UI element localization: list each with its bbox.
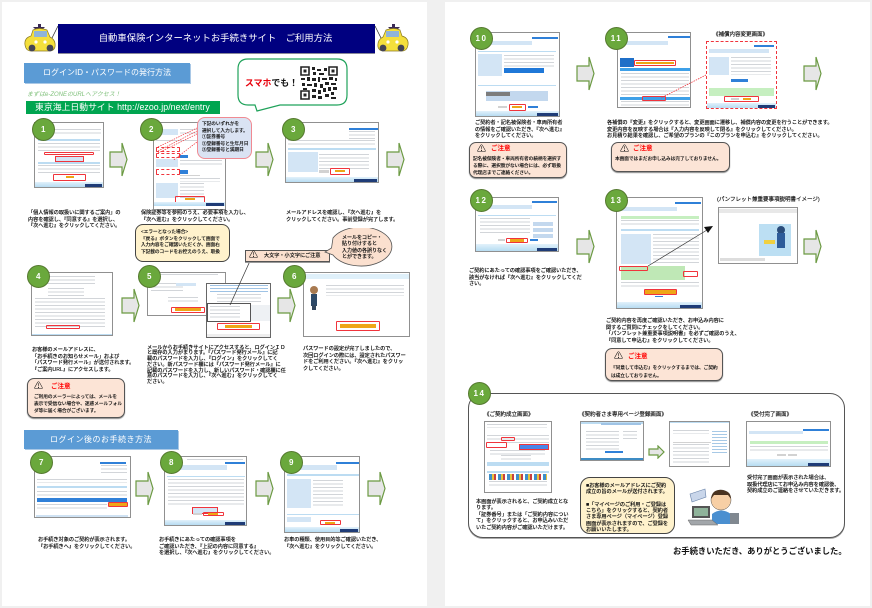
text step 9: 『次へ進む』をクリックしてください。 (284, 544, 376, 550)
arrow 5 (277, 288, 296, 322)
caution: step 13 (605, 348, 723, 381)
step 11 screenshot (617, 32, 691, 108)
text step 2 (141, 209, 249, 223)
caution text: 記名被保険者・車両所有者の続柄を選択す (473, 156, 561, 161)
step 5 screenshot B (206, 283, 271, 338)
text step 8: を選択し、『次へ進む』をクリックしてください。 (159, 550, 274, 556)
title banner: 自動車保険インターネットお手続きサイト ご利用方法 (99, 33, 332, 43)
text step 5 (147, 344, 286, 385)
arrow 10 (576, 56, 595, 90)
leader line (230, 263, 250, 306)
text step 10: の情報をご確認いただき、『次へ進む』 (475, 127, 565, 133)
text step 7: 『お手続きへ』をクリックしてください。 (38, 544, 135, 550)
step 2 screenshot (153, 122, 226, 210)
URL bar: 東京海上日動サイト http://ezoo.jp/next/entry (35, 102, 210, 112)
step 3 screenshot (285, 122, 379, 183)
text step 3: クリックしてください。事前登録が完了します。 (286, 217, 398, 223)
text step 11: お見積り結果を確認し、ご希望のプランの『このプランを申込む』をクリックしてください。 (607, 133, 823, 139)
text step 9 (284, 536, 381, 550)
caution: step 4 (27, 378, 125, 418)
screenshot: contract complete (484, 421, 552, 493)
caution heading: ご注意 (633, 145, 652, 152)
step 4 number: 4 (36, 272, 41, 281)
text step 12: 該当がなければ『次へ進む』をクリックしてくだ (469, 275, 582, 281)
ellipse text: とができます。 (342, 254, 377, 260)
caution text: 表示で受信ない場合や、迷惑メールフォル (34, 401, 122, 406)
icon: warning: ⚠ (620, 144, 629, 154)
arrow 8 (255, 472, 274, 506)
section heading: login ID and password: ログインID・パスワードの発行方法 (43, 68, 171, 77)
step 14 number (468, 382, 491, 405)
section heading: after login (24, 430, 178, 449)
callout body: ①証券番号 (202, 134, 225, 139)
caution text: る際に、選択肢がない場合には、必ず取扱 (473, 163, 561, 168)
label text: 大文字・小文字にご注意 (264, 253, 320, 259)
callout text: スマホでも！ (245, 78, 298, 88)
text step 5: 載のパスワードを入力し、『ログイン』をクリックしてく (147, 356, 278, 362)
label: case warning (245, 250, 330, 262)
step 2 number: 2 (149, 125, 154, 134)
text: reception complete: 契約成立のご連絡をさせていただきます。 (747, 488, 844, 494)
text step 4: 『ご案内URL』にアクセスします。 (32, 367, 113, 373)
closing thanks: お手続きいただき、ありがとうございました。 (673, 546, 847, 556)
callout body: ③登録番号と満期日 (202, 147, 244, 152)
box: my page notes: ■「マイページのご利用・ご登録は (586, 502, 666, 508)
callout: input choices with red leader lines (158, 117, 252, 160)
text step 8 (159, 536, 274, 556)
icon: warning: ⚠ (614, 351, 623, 361)
step 11 number: 11 (611, 34, 622, 43)
icon: yellow car right (374, 24, 408, 52)
text step 11: 各補償の『変更』をクリックすると、変更画面に遷移し、補償内容の変更を行うことができます。 (607, 120, 832, 126)
text step 1: 内容を確認し、『同意する』を選択し、 (28, 217, 118, 223)
text step 5: ださい。新パスワード欄には『パスワード発行メール』に (147, 362, 281, 368)
text: access prompt: まずはe-ZONEのURLへアクセス！ (27, 92, 121, 98)
step 11 number (605, 27, 628, 50)
step 10 screenshot (475, 32, 560, 117)
text: contract complete (476, 498, 569, 531)
icon: warning: ⚠ (477, 144, 486, 154)
step 7 screenshot (34, 456, 131, 518)
icon: yellow car left (24, 24, 58, 52)
step 6 number: 6 (292, 272, 297, 281)
text: reception complete: 取扱代理店にてお申込み内容を確認後、 (747, 482, 839, 488)
text step 7 (38, 536, 135, 550)
step 2 number (140, 118, 163, 141)
callout body: 選択して入力します。 (202, 128, 248, 132)
text step 4: 「パスワード発行メール」が送付されます。 (32, 360, 134, 366)
box: my page notes (580, 477, 675, 534)
label: reception complete: 《受付完了画面》 (748, 412, 792, 418)
step 4 number (27, 265, 50, 288)
label: pamphlet image: (パンフレット兼重要事項説明書イメージ) (717, 197, 820, 203)
box: error notice: 入力内容をご確認いただくか、画面右 (141, 242, 220, 247)
text step 13: ご契約内容を再度ご確認いただき、お申込み内容に (606, 318, 724, 324)
text step 5: ださい。 (147, 379, 168, 385)
caution text: は成立しておりません。 (611, 372, 662, 378)
coverage change screenshot (706, 41, 777, 109)
caution heading: ご注意 (628, 353, 648, 360)
text step 13: 「パンフレット兼重要事項説明書」を必ずご確認のうえ、 (606, 331, 740, 337)
step 9 screenshot (284, 456, 360, 533)
step 3 number: 3 (291, 125, 296, 134)
label: coverage change screen: 《補償内容変更画面》 (713, 32, 768, 38)
text step 4: お客様のメールアドレスに、 (32, 347, 99, 353)
arrow 2 (255, 142, 274, 176)
text step 13: 関するご質問にチェックをしてください。 (606, 325, 703, 331)
arrow 1 (109, 142, 128, 176)
caution text: ダ等に届く場合がございます。 (34, 408, 99, 413)
text: reception complete (747, 475, 844, 495)
callout body: 下記のいずれかを (202, 121, 239, 126)
caution text: 代理店までご連絡ください。 (473, 170, 533, 175)
text step 10 (475, 119, 565, 139)
arrow 11 (803, 56, 822, 90)
step 5 number (138, 265, 161, 288)
caution text (473, 156, 561, 175)
text step 6: クしてください。 (303, 366, 344, 372)
step 1 number: 1 (41, 125, 46, 134)
callout body (197, 117, 252, 159)
text step 8: お手続きにあたっての確認事項を (159, 537, 236, 543)
step 10 number (470, 27, 493, 50)
step 1 number (32, 118, 55, 141)
text step 12 (469, 267, 582, 287)
caution heading: ご注意 (51, 383, 70, 390)
label: my page registration: 《契約者さま専用ページ登録画面》 (579, 412, 667, 418)
caution text (611, 364, 718, 378)
text step 11: 変更内容を反映する場合は『入力内容を反映して閉る』をクリックしてください。 (607, 127, 797, 133)
box: my page notes: 画面が表示されますので、ご登録を (586, 521, 668, 527)
step 14 number: 14 (474, 389, 485, 398)
red dashed leader (660, 74, 706, 98)
caution: step 11 (611, 142, 730, 172)
text: contract complete: 「証券番号」または「ご契約内容につい (476, 512, 569, 518)
text: reception complete: 受付完了画面が表示された場合は、 (747, 475, 829, 481)
step 12 number (470, 189, 493, 212)
section heading: login ID and password (24, 63, 190, 83)
text step 6 (303, 345, 406, 372)
panel: page 2 (445, 2, 870, 606)
icon: QR code (300, 66, 338, 100)
text: contract complete: ります。 (476, 505, 496, 511)
box: my page notes: さま専用ページ（マイページ）登録 (586, 514, 668, 520)
text step 12: さい。 (469, 281, 484, 287)
box: my page notes: こちら」をクリックすると、契約者 (586, 508, 668, 514)
step 4 screenshot (31, 272, 113, 336)
arrow 7 (135, 472, 154, 506)
step 12 screenshot (475, 197, 559, 252)
text step 2: 保険証券等を参照のうえ、必要事項を入力し、 (141, 210, 249, 216)
box: my page notes: ■お客様のメールアドレスにご契約 (586, 483, 666, 489)
step 13 number: 13 (611, 196, 622, 205)
icon: person at laptop (686, 488, 741, 526)
text step 5: 意のパスワードを入力し、『次へ進む』をクリックしてく (147, 373, 278, 379)
box: error notice: <エラーとなった場合> (141, 229, 188, 234)
panel: page 1 (2, 2, 427, 606)
panel: step 14 (468, 393, 845, 538)
text step 6: パスワードの設定が完了しましたので、 (303, 346, 395, 352)
text step 1 (28, 209, 121, 229)
box: my page notes: 成立の旨のメールが送付されます。 (586, 489, 668, 495)
step 7 number (30, 451, 53, 474)
step 3 number (282, 118, 305, 141)
step 12 number: 12 (476, 196, 487, 205)
title banner (58, 24, 375, 53)
text: contract complete: いたご契約内容がご確認いただけます。 (476, 525, 568, 531)
screenshot: reception complete (746, 421, 831, 467)
box: my page notes: お願いいたします。 (586, 527, 632, 533)
text step 9: お車の種類、使用目的等ご確認いただき、 (284, 537, 381, 543)
pamphlet screenshot (718, 207, 798, 264)
callout body: ②登録番号と生年月日 (202, 140, 248, 146)
text step 1: 『次へ進む』をクリックしてください。 (28, 223, 120, 229)
text: contract complete: 本画面が表示されると、ご契約成立とな (476, 499, 568, 505)
text step 13: 『同意して申込む』をクリックしてください。 (606, 338, 714, 344)
ellipse text (342, 234, 387, 260)
arrow: registration flow (648, 445, 665, 459)
step 9 number (280, 451, 303, 474)
text step 12: ご契約にあたっての確認事項をご確認いただき、 (469, 268, 581, 274)
step 10 number: 10 (476, 34, 487, 43)
caution text (34, 394, 122, 413)
text step 10: をクリックしてください。 (475, 133, 536, 139)
text step 5: 記載のパスワードを入力し、新しいパスワード・確認欄に任 (147, 368, 286, 374)
step 7 number: 7 (39, 458, 44, 467)
caution text: 本画面ではまだお申し込みは完了しておりません。 (615, 156, 721, 161)
icon: warning: ⚠ (34, 381, 43, 391)
step 8 number (160, 451, 183, 474)
black arrow to pamphlet (648, 226, 713, 266)
step 13 screenshot (616, 197, 703, 309)
icon: warning small: ⚠ (249, 250, 258, 260)
section heading: after login: ログイン後のお手続き方法 (50, 435, 152, 444)
box: error notice (135, 224, 230, 262)
arrow 12 (576, 230, 595, 264)
text step 6: ドをご利用ください。『次へ進む』をクリッ (303, 359, 403, 365)
text step 10: ご契約者・記名被保険者・車両所有者 (475, 120, 562, 126)
step 1 screenshot (34, 122, 104, 188)
speech ellipse: copy paste tip (324, 228, 392, 266)
arrow 13 (803, 230, 822, 264)
text step 1: 「個人情報の取扱いに関するご案内」の (28, 210, 121, 216)
callout: smartphone QR (237, 58, 348, 112)
step 5 screenshot A (147, 272, 226, 316)
URL bar (26, 101, 220, 114)
step 6 screenshot (303, 272, 410, 337)
text step 6: 次回ログインの際には、設定されたパスワー (303, 353, 406, 359)
screenshot: my page A (580, 421, 644, 461)
label: contract complete: 《ご契約成立画面》 (484, 412, 534, 418)
box: error notice: 『戻る』ボタンをクリックして画面で (141, 236, 220, 241)
text step 13 (606, 317, 740, 344)
arrow 4 (121, 288, 140, 322)
step 8 screenshot (164, 456, 247, 526)
box: error notice: 下記載のコードをお控えのうえ、取扱 (141, 249, 220, 254)
caution: step 10 (469, 142, 567, 178)
arrow 3 (386, 142, 405, 176)
text step 2: 『次へ進む』をクリックしてください。 (141, 217, 233, 223)
ellipse text: 貼り付けすると (342, 241, 377, 247)
text step 3 (286, 209, 398, 223)
step 8 number: 8 (169, 458, 174, 467)
text step 8: ご確認いただき、『上記の内容に同意する』 (159, 544, 259, 550)
text step 11 (607, 119, 832, 139)
caution text: 『同意して申込む』をクリックするまでは、ご契約 (611, 365, 718, 370)
step 5 number: 5 (147, 272, 152, 281)
text step 5: メールからお手続きサイトにアクセスすると、ログインＩＤ (147, 344, 285, 350)
text step 3: メールアドレスを確認し、『次へ進む』を (286, 210, 381, 216)
text: contract complete: て」をクリックすると、お申込みいただ (476, 518, 568, 524)
step 13 number (605, 189, 628, 212)
step 6 number (283, 265, 306, 288)
ellipse text: 入力値の各誤りなく (342, 248, 387, 254)
screenshot: my page B (669, 421, 730, 467)
arrow 9 (367, 472, 386, 506)
text step 5: と既存の入力がまります。『パスワード発行メール』に記 (147, 350, 278, 356)
text step 7: お手続き対象のご契約が表示されます。 (38, 537, 130, 543)
ellipse text: メールをコピー・ (342, 235, 382, 241)
text step 4 (32, 346, 134, 373)
caution text: ご利用のメーラーによっては、メールを (34, 394, 117, 399)
step 9 number: 9 (289, 458, 294, 467)
text step 4: 「お手続きのお知らせメール」および (32, 354, 119, 360)
caution heading: ご注意 (491, 145, 510, 152)
